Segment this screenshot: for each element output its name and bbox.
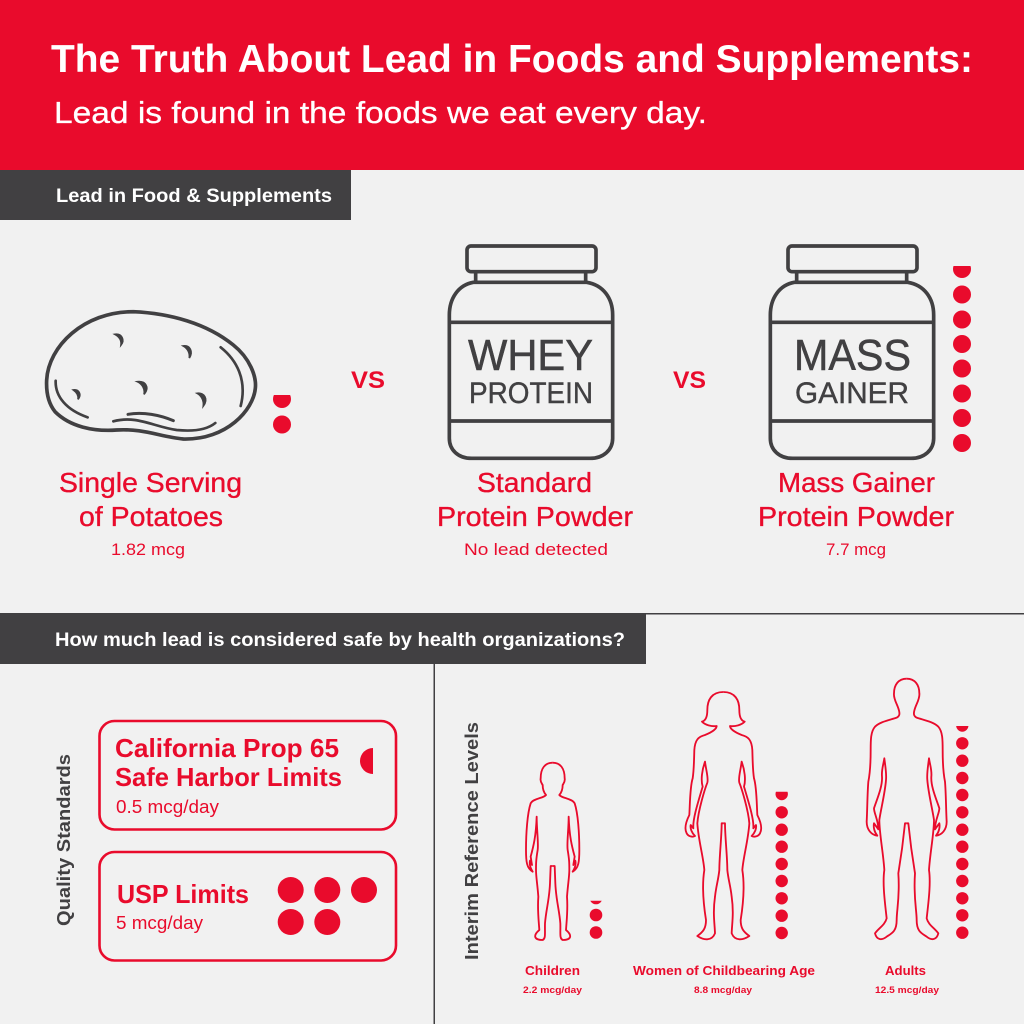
dots: potato lead amount (273, 395, 291, 434)
mass gainer label: Protein Powder (758, 501, 954, 532)
mass gainer label: 7.7 mcg (826, 540, 886, 559)
standard protein label: Protein Powder (437, 501, 633, 532)
section heading: safe lead levels: How much lead is considered safe by health organizations? (55, 630, 625, 651)
mass gainer label (758, 467, 954, 559)
icon: mass gainer jar: GAINER (795, 377, 909, 410)
vs: VS (673, 367, 706, 394)
section heading: lead in food and supplements (0, 170, 351, 220)
subtitle: Lead is found in the foods we eat every day. (54, 95, 707, 130)
title: The Truth About Lead in Foods and Supplements: (51, 38, 973, 81)
potato label: 1.82 mcg (111, 540, 185, 559)
icon: whey protein jar: PROTEIN (469, 377, 593, 410)
half dot (360, 748, 373, 774)
dots: adult lead amount (956, 719, 968, 939)
adult label: 12.5 mcg/day (875, 985, 940, 996)
panel: california prop 65: California Prop 65 (115, 733, 339, 763)
figure: adult man (867, 679, 947, 939)
standard protein label: Standard (477, 467, 592, 498)
child label: Children (525, 964, 580, 978)
child label: 2.2 mcg/day (523, 985, 583, 996)
child label (523, 964, 583, 996)
vs: VS (351, 367, 385, 394)
figure: woman (685, 692, 761, 939)
panel: california prop 65: Safe Harbor Limits (115, 762, 342, 792)
section heading: safe lead levels (0, 613, 646, 664)
panel: california prop 65 (100, 721, 396, 830)
standard protein label: No lead detected (464, 540, 608, 559)
vertical label: quality standards: Quality Standards (54, 754, 74, 926)
women label (633, 964, 815, 996)
section heading: lead in food and supplements: Lead in Food & Supplements (56, 186, 332, 207)
women label: Women of Childbearing Age (633, 964, 815, 978)
women label: 8.8 mcg/day (694, 985, 753, 996)
panel: usp limits: 5 mcg/day (116, 913, 203, 933)
header banner (0, 0, 1024, 170)
adult label (875, 964, 940, 996)
five dots (278, 877, 377, 935)
dots: women lead amount (776, 788, 788, 939)
icon: potato (47, 312, 255, 439)
potato label: of Potatoes (79, 501, 223, 532)
icon: mass gainer jar: MASS (794, 331, 911, 380)
adult label: Adults (885, 964, 926, 978)
panel: usp limits (100, 852, 396, 960)
icon: whey protein jar (449, 246, 613, 458)
standard protein label (437, 467, 633, 559)
panel: usp limits: USP Limits (117, 879, 249, 909)
icon: mass gainer jar (770, 246, 934, 458)
dots: mass gainer lead amount (953, 260, 971, 452)
mass gainer label: Mass Gainer (778, 467, 935, 498)
panel: california prop 65: 0.5 mcg/day (116, 797, 219, 817)
vertical label: interim reference levels: Interim Reference Levels (462, 722, 482, 960)
potato label (59, 467, 242, 559)
potato label: Single Serving (59, 467, 242, 498)
dots: child lead amount (590, 900, 602, 939)
icon: whey protein jar: WHEY (468, 331, 593, 380)
figure: child (526, 763, 579, 940)
